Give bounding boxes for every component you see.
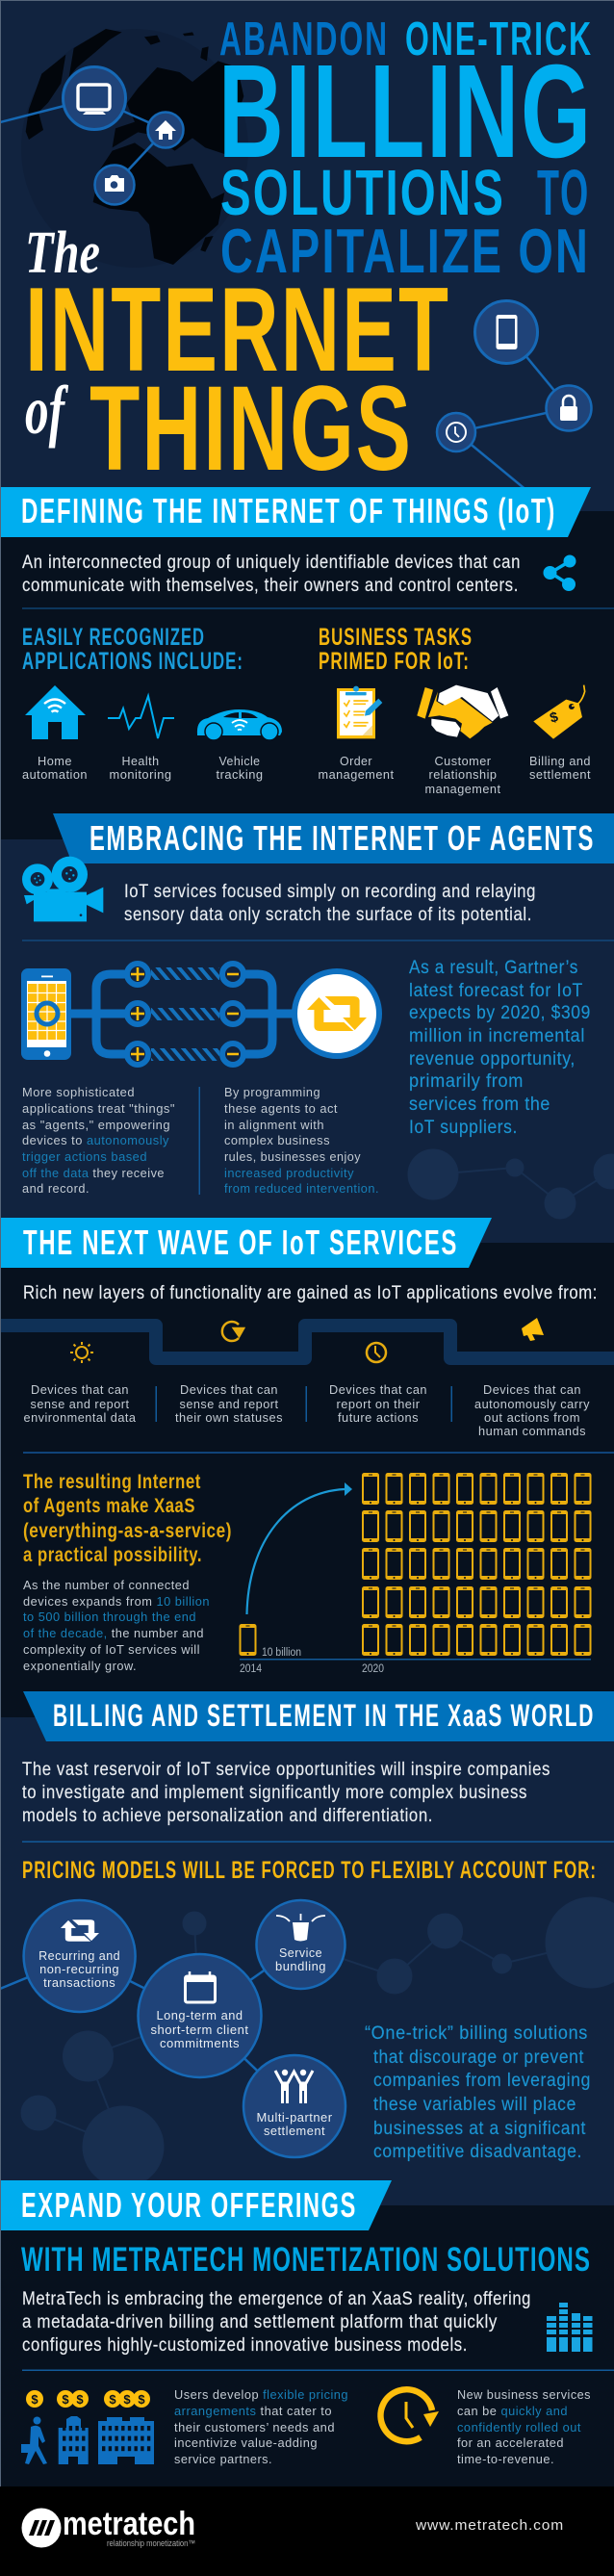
text: metratech embracing: a metadata-driven billing and settlement platform that quickly bbox=[22, 2312, 498, 2332]
pricing model: multi-partner settlement: Multi-partner bbox=[256, 2110, 333, 2125]
icon: person with briefcase bbox=[21, 2416, 47, 2464]
icon: smartphone bbox=[475, 300, 537, 364]
callout: one-trick billing: that discourage or prevent bbox=[373, 2048, 584, 2068]
text: programming agents bbox=[224, 1085, 379, 1196]
text: vast reservoir: models to achieve personalization and differentiation. bbox=[22, 1806, 433, 1826]
text: connected devices: devices expands from 10 billion bbox=[23, 1594, 210, 1609]
callout: one-trick billing: companies from leveraging bbox=[373, 2071, 591, 2091]
text: programming agents: By programming bbox=[224, 1085, 320, 1099]
text: rolled out: time-to-revenue. bbox=[457, 2452, 554, 2466]
icon: health pulse bbox=[108, 696, 174, 738]
banner: the next wave bbox=[0, 1218, 492, 1268]
panel: footer bbox=[0, 2486, 614, 2576]
heading: business tasks: PRIMED FOR IoT: bbox=[319, 649, 470, 675]
text: vast reservoir: The vast reservoir of IoT service opportunities will inspire companies bbox=[22, 1760, 550, 1780]
title: THINGS bbox=[90, 362, 413, 496]
panel: defining IoT bbox=[0, 487, 614, 839]
text: Gartner forecast: IoT suppliers. bbox=[409, 1118, 518, 1138]
text: rolled out: can be quickly and bbox=[457, 2404, 568, 2418]
text: programming agents: rules, businesses enjoy bbox=[224, 1149, 361, 1164]
icon: camera bbox=[94, 166, 135, 204]
text: Gartner forecast: expects by 2020, $309 bbox=[409, 1003, 591, 1023]
icon: large building bbox=[98, 2417, 154, 2464]
icon: coins: $ bbox=[123, 2392, 131, 2407]
banner: expand your offerings: EXPAND YOUR OFFERINGS bbox=[21, 2185, 357, 2225]
text: rolled out bbox=[457, 2387, 591, 2466]
text: rolled out: New business services bbox=[457, 2387, 591, 2402]
text: connected devices bbox=[23, 1578, 210, 1673]
text: connected devices: complexity of IoT services will bbox=[23, 1642, 200, 1657]
pricing model: long-term commitments: commitments bbox=[160, 2036, 240, 2050]
icon: coins bbox=[26, 2390, 150, 2408]
pricing model: multi-partner settlement bbox=[243, 2055, 345, 2157]
labels: applications and tasks: monitoring bbox=[110, 767, 171, 782]
callout: one-trick billing: these variables will place bbox=[373, 2095, 576, 2115]
background network nodes bbox=[21, 1897, 614, 2187]
text: Gartner forecast: services from the bbox=[409, 1095, 550, 1115]
panel: next wave of IoT services bbox=[0, 1218, 614, 1717]
text: sophisticated applications: off the data they receive bbox=[22, 1166, 165, 1180]
pricing model: recurring: transactions bbox=[43, 1975, 115, 1990]
labels: applications and tasks: tracking bbox=[216, 767, 264, 782]
text: sophisticated applications: devices to autonomously bbox=[22, 1133, 169, 1147]
title: ABANDON bbox=[219, 13, 389, 65]
text: metratech embracing: configures highly-customized innovative business models. bbox=[22, 2335, 468, 2356]
heading: resulting internet of agents bbox=[23, 1471, 232, 1566]
pricing model: recurring bbox=[24, 1900, 136, 2012]
title: of bbox=[25, 372, 68, 449]
text: programming agents: from reduced intervention. bbox=[224, 1181, 379, 1196]
panel: billing and settlement bbox=[0, 1691, 614, 2205]
arrow: growth curve bbox=[246, 1482, 352, 1614]
heading: business tasks: BUSINESS TASKS bbox=[319, 625, 473, 651]
text: IoT services: IoT services focused simply on recording and relaying bbox=[124, 882, 536, 902]
pricing model: service bundling: Service bbox=[279, 1945, 322, 1960]
text: programming agents: complex business bbox=[224, 1133, 330, 1147]
text: device stages: out actions from bbox=[484, 1410, 580, 1425]
labels: applications and tasks: management bbox=[318, 767, 395, 782]
icon: share bbox=[544, 555, 576, 591]
title bbox=[25, 13, 593, 496]
text: flexible pricing: Users develop flexible pricing bbox=[174, 2387, 348, 2402]
text: Gartner forecast: As a result, Gartner’s bbox=[409, 958, 578, 978]
labels: applications and tasks: automation bbox=[22, 767, 88, 782]
labels: applications and tasks: settlement bbox=[529, 767, 591, 782]
text: flexible pricing: service partners. bbox=[174, 2452, 272, 2466]
text: device stages bbox=[23, 1382, 590, 1438]
logo: metratech bbox=[21, 2506, 195, 2548]
panel: expand your offerings bbox=[0, 2180, 614, 2486]
text: Gartner forecast: primarily from bbox=[409, 1071, 524, 1092]
text: device stages: Devices that can bbox=[180, 1382, 278, 1397]
pricing model: recurring: non-recurring bbox=[39, 1962, 119, 1976]
logo: metratech: metratech bbox=[63, 2506, 195, 2542]
icon: smart home bbox=[25, 685, 86, 739]
icon: coins: $ bbox=[31, 2392, 38, 2407]
icon: coins: $ bbox=[109, 2392, 116, 2407]
labels: applications and tasks: Health bbox=[121, 754, 160, 768]
icon: megaphone bbox=[522, 1318, 544, 1341]
text: flexible pricing bbox=[174, 2387, 348, 2466]
callout: one-trick billing: competitive disadvantage. bbox=[373, 2142, 582, 2162]
pricing model: multi-partner settlement: settlement bbox=[264, 2124, 325, 2138]
icon: price tag: $ bbox=[549, 709, 560, 727]
text: connected devices: of the decade, the number and bbox=[23, 1626, 204, 1640]
icon: order clipboard bbox=[337, 686, 382, 738]
heading: applications: APPLICATIONS INCLUDE: bbox=[22, 649, 243, 675]
banner: expand your offerings bbox=[0, 2180, 392, 2230]
text: flexible pricing: incentivize value-adding bbox=[174, 2435, 318, 2450]
text: sophisticated applications: trigger actions based bbox=[22, 1149, 147, 1164]
heading: applications: EASILY RECOGNIZED bbox=[22, 625, 205, 651]
phones: 2020 grid bbox=[362, 1473, 591, 1656]
chart labels bbox=[240, 1647, 384, 1675]
text: device stages: their own statuses bbox=[175, 1410, 283, 1425]
icon: coins: $ bbox=[138, 2392, 145, 2407]
labels: applications and tasks: Order bbox=[340, 754, 372, 768]
text: device stages: report on their bbox=[337, 1397, 421, 1411]
text: device stages: human commands bbox=[478, 1424, 586, 1438]
text: definition: communicate with themselves, their owners and control centers. bbox=[22, 576, 519, 596]
text: device stages: autonomously carry bbox=[474, 1397, 590, 1411]
text: sophisticated applications: More sophisticated bbox=[22, 1085, 135, 1099]
icon: handshake bbox=[417, 685, 508, 738]
icon: home bbox=[148, 112, 183, 148]
icon: globe with dark continents bbox=[21, 29, 248, 268]
heading: resulting internet of agents: of Agents make XaaS bbox=[23, 1495, 195, 1517]
heading: resulting internet of agents: The resulting Internet bbox=[23, 1471, 201, 1493]
icon: coins: $ bbox=[76, 2392, 84, 2407]
url: www.metratech.com bbox=[415, 2517, 564, 2534]
labels: applications and tasks bbox=[22, 754, 591, 796]
icon: sun bbox=[70, 1342, 93, 1363]
text: Gartner forecast: latest forecast for IoT bbox=[409, 981, 583, 1001]
text: device stages: sense and report bbox=[179, 1397, 279, 1411]
icon: small building bbox=[59, 2416, 89, 2464]
text: metratech embracing: MetraTech is embracing the emergence of an XaaS reality, offering bbox=[22, 2289, 531, 2309]
logo: metratech: relationship monetization™ bbox=[107, 2538, 195, 2548]
callout: one-trick billing: “One-trick” billing solutions bbox=[365, 2023, 588, 2044]
icon: monitor bbox=[64, 67, 125, 129]
labels: applications and tasks: Customer bbox=[435, 754, 492, 768]
callout: one-trick billing bbox=[365, 2023, 591, 2162]
labels: applications and tasks: Home bbox=[38, 754, 72, 768]
text: Gartner forecast: million in incremental bbox=[409, 1026, 585, 1046]
heading: resulting internet of agents: (everything-as-a-service) bbox=[23, 1520, 232, 1542]
icon: car bbox=[197, 709, 282, 740]
icon: clock bbox=[367, 1343, 386, 1362]
text: metratech embracing bbox=[22, 2289, 531, 2356]
text: connected devices: to 500 billion through the end bbox=[23, 1610, 196, 1624]
chart: connected devices growth bbox=[239, 1473, 591, 1675]
text: rolled out: confidently rolled out bbox=[457, 2420, 581, 2434]
chart labels: 10 billion bbox=[262, 1647, 301, 1659]
text: programming agents: these agents to act bbox=[224, 1101, 338, 1116]
icon network: devices bottom-right bbox=[437, 300, 591, 491]
text: sophisticated applications bbox=[22, 1085, 175, 1196]
title: The bbox=[25, 220, 100, 286]
callout: one-trick billing: businesses at a significant bbox=[373, 2119, 586, 2139]
pricing model: recurring: Recurring and bbox=[38, 1948, 120, 1963]
text: sophisticated applications: applications treat "things" bbox=[22, 1101, 175, 1116]
text: device stages: future actions bbox=[338, 1410, 419, 1425]
text: connected devices: exponentially grow. bbox=[23, 1659, 137, 1673]
text: IoT services bbox=[124, 882, 536, 925]
icon: movie camera bbox=[22, 857, 103, 921]
text: connected devices: As the number of connected bbox=[23, 1578, 190, 1592]
background network nodes bbox=[408, 1149, 614, 1219]
icon: bar meter bbox=[547, 2303, 593, 2352]
connector lines bbox=[0, 1945, 300, 2106]
text: definition bbox=[22, 553, 521, 596]
chart labels: 2014 bbox=[240, 1663, 263, 1675]
pricing model: service bundling: bundling bbox=[275, 1959, 326, 1973]
banner: billing and settlement bbox=[23, 1691, 614, 1741]
icon: loop circle bbox=[294, 971, 379, 1056]
text: device stages: Devices that can bbox=[329, 1382, 427, 1397]
text: sophisticated applications: and record. bbox=[22, 1181, 90, 1196]
title: SOLUTIONS bbox=[220, 157, 505, 229]
panel: header bbox=[0, 0, 614, 511]
phone: 2014 bbox=[239, 1624, 256, 1656]
labels: applications and tasks: relationship bbox=[429, 767, 497, 782]
diagram: agent circuit bbox=[21, 964, 379, 1065]
icon: lock bbox=[547, 385, 591, 431]
icon: smartphone node bbox=[21, 968, 71, 1060]
text: flexible pricing: their customers’ needs and bbox=[174, 2420, 335, 2434]
icon: refresh bbox=[222, 1322, 243, 1341]
stepped path bbox=[0, 1326, 614, 1358]
text: vast reservoir bbox=[22, 1760, 550, 1826]
pricing model: long-term commitments: short-term client bbox=[150, 2022, 248, 2037]
text: definition: An interconnected group of uniquely identifiable devices that can bbox=[22, 553, 521, 573]
panel: internet of agents bbox=[0, 813, 614, 1243]
text: programming agents: in alignment with bbox=[224, 1118, 324, 1132]
icon network: devices top-left bbox=[0, 67, 183, 204]
text: sophisticated applications: as "agents," empowering bbox=[22, 1118, 170, 1132]
pricing model: long-term commitments: Long-term and bbox=[156, 2008, 243, 2022]
pricing model: service bundling bbox=[256, 1900, 345, 1989]
heading: resulting internet of agents: a practical possibility. bbox=[23, 1544, 202, 1566]
icon: clock with arrow bbox=[381, 2389, 439, 2441]
heading: applications bbox=[22, 625, 243, 675]
text: device stages: Devices that can bbox=[483, 1382, 581, 1397]
text: device stages: environmental data bbox=[23, 1410, 137, 1425]
text: Gartner forecast: revenue opportunity, bbox=[409, 1049, 576, 1069]
text: rolled out: for an accelerated bbox=[457, 2435, 564, 2450]
labels: applications and tasks: Vehicle bbox=[219, 754, 260, 768]
text: device stages: Devices that can bbox=[31, 1382, 129, 1397]
plus and minus nodes bbox=[127, 964, 243, 1065]
text: device stages: sense and report bbox=[31, 1397, 129, 1411]
text: Gartner forecast bbox=[409, 958, 591, 1138]
chart labels: 2020 bbox=[362, 1663, 384, 1675]
icon: coins: $ bbox=[62, 2392, 69, 2407]
labels: applications and tasks: management bbox=[425, 782, 500, 796]
text: vast reservoir: to investigate and implement significantly more complex business bbox=[22, 1783, 527, 1803]
pricing model: long-term commitments bbox=[139, 1954, 262, 2077]
icon: clock bbox=[437, 413, 475, 451]
labels: applications and tasks: Billing and bbox=[529, 754, 591, 768]
text: IoT services: sensory data only scratch the surface of its potential. bbox=[124, 905, 532, 925]
text: programming agents: increased productivity bbox=[224, 1166, 354, 1180]
heading: business tasks bbox=[319, 625, 473, 675]
icon: price tag bbox=[533, 685, 585, 739]
text: flexible pricing: arrangements that cater to bbox=[174, 2404, 332, 2418]
